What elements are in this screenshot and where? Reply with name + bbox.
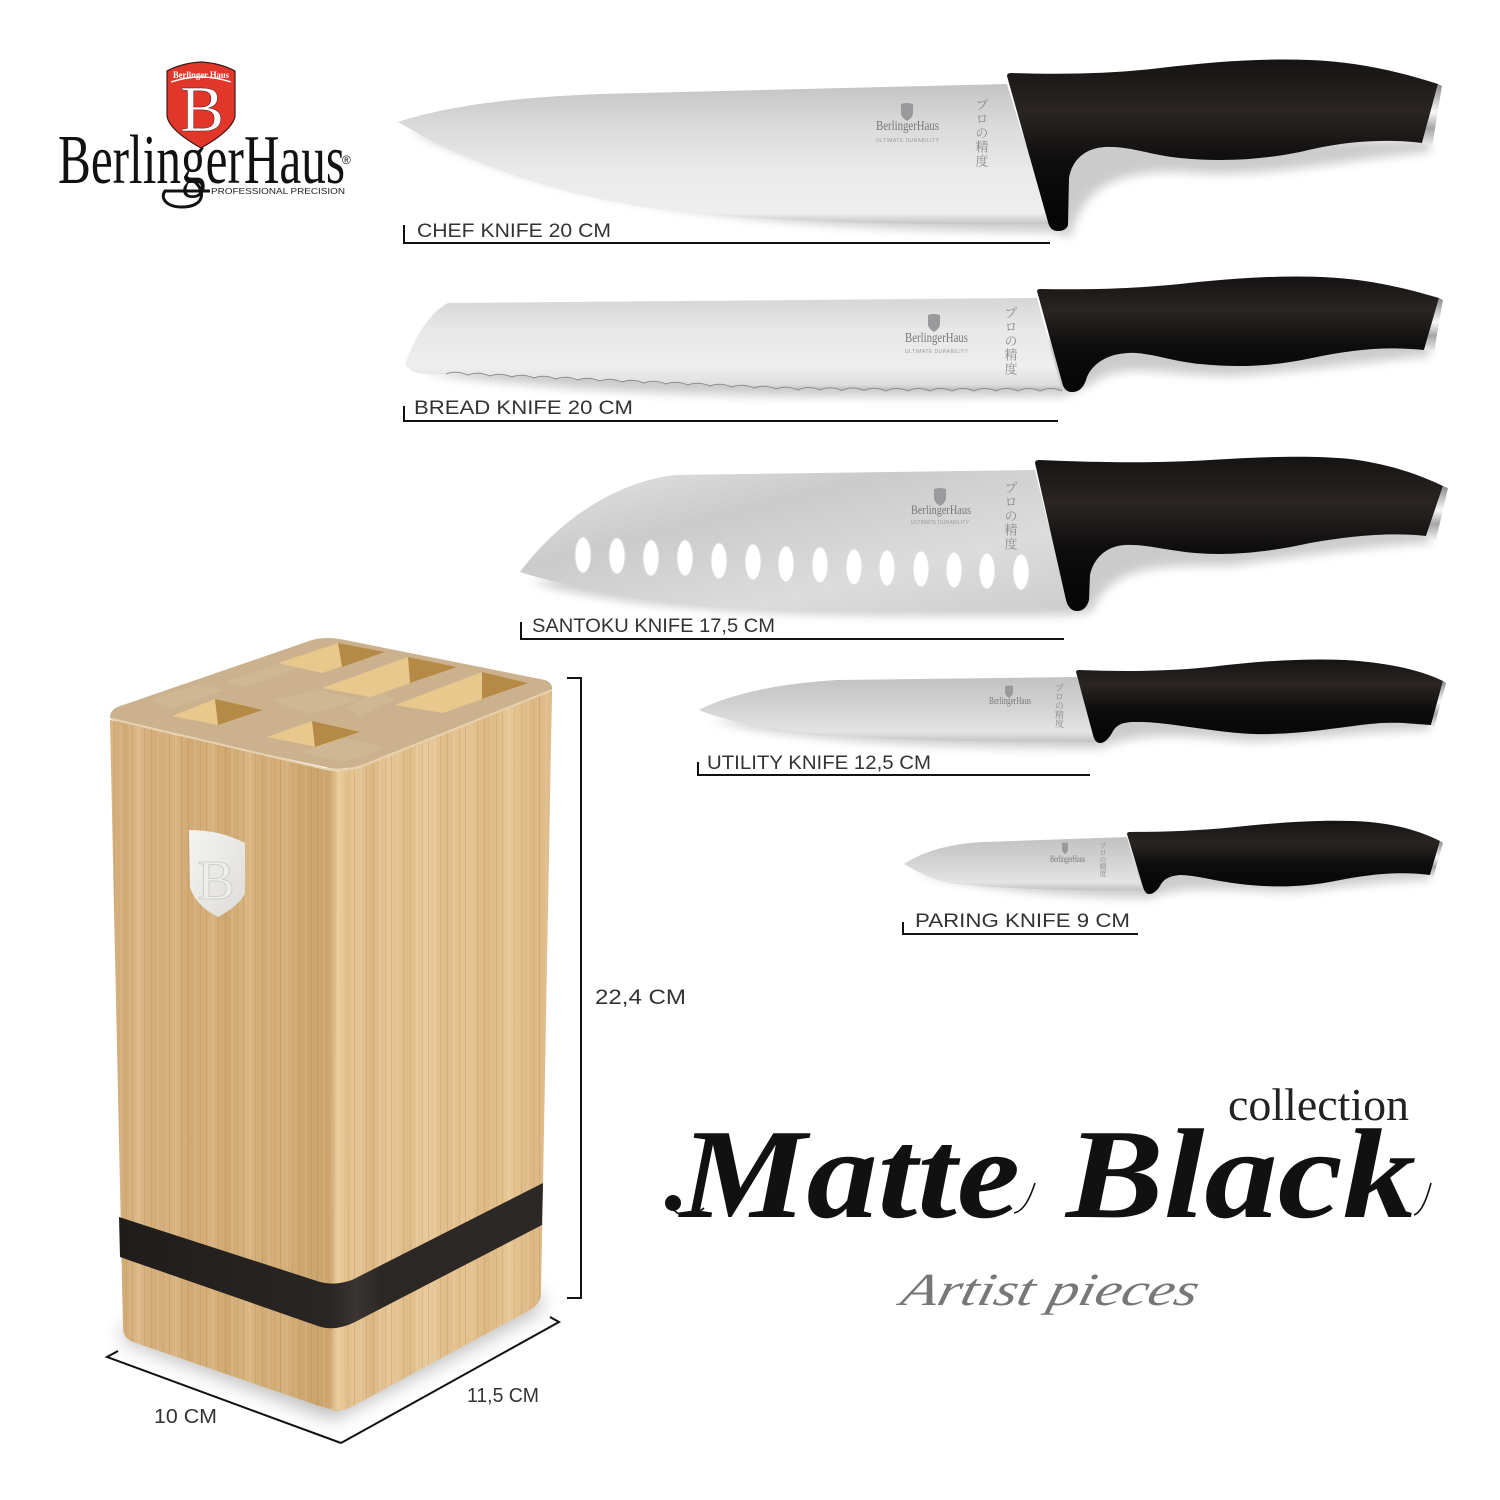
- blade engraving: プロの精度: [1002, 306, 1018, 376]
- tagline: PROFESSIONAL PRECISION: [211, 187, 345, 196]
- blade engraving: [905, 306, 1018, 376]
- blade engraving: [1050, 842, 1107, 878]
- blade engraving: BerlingerHaus: [911, 502, 971, 517]
- black band: [119, 1183, 543, 1328]
- blade: [904, 837, 1143, 890]
- blade engraving: プロの精度: [1002, 481, 1018, 551]
- bamboo knife block: [110, 638, 552, 1418]
- handle: [1037, 276, 1439, 392]
- blade engraving: ULTIMATE DURABILITY: [911, 520, 970, 526]
- icon: red shield: B: [180, 73, 224, 146]
- title flourishes: [665, 1183, 1431, 1216]
- blade engraving: ULTIMATE DURABILITY: [905, 349, 969, 355]
- santoku knife label: [521, 616, 1064, 639]
- block left face: [110, 720, 338, 1410]
- end-grain patches: [150, 664, 395, 762]
- utility knife label: UTILITY KNIFE 12,5 CM: [707, 753, 931, 774]
- brand logo: [58, 62, 351, 207]
- main title: Matte: Matte: [678, 1103, 1020, 1245]
- handle: [1076, 659, 1443, 743]
- chef knife label: CHEF KNIFE 20 CM: [417, 221, 611, 242]
- utility knife: [699, 659, 1446, 748]
- end cap: [1424, 298, 1443, 352]
- bread knife: [405, 276, 1443, 397]
- paring knife: [904, 821, 1443, 898]
- blade engraving: [876, 98, 988, 168]
- utility knife label: [698, 753, 1090, 775]
- descender loop: [163, 182, 210, 207]
- handle: [1127, 821, 1440, 894]
- blade engraving: BerlingerHaus: [905, 331, 968, 346]
- depth dimension: [341, 1317, 559, 1443]
- bread knife label: BREAD KNIFE 20 CM: [414, 398, 633, 419]
- script tagline: Artist pieces: [892, 1265, 1205, 1316]
- height dimension: [567, 678, 686, 1298]
- blade engraving: [989, 683, 1064, 728]
- santoku knife: [520, 457, 1448, 616]
- blade engraving: BerlingerHaus: [1050, 854, 1085, 864]
- granton dimples: [575, 537, 1029, 590]
- blade: [520, 470, 1068, 611]
- chef knife: [398, 59, 1442, 238]
- blade: [405, 298, 1062, 391]
- metal shield badge: [189, 830, 245, 917]
- santoku knife label: SANTOKU KNIFE 17,5 CM: [532, 616, 775, 637]
- block top face: [110, 638, 552, 769]
- blade engraving: プロの精度: [974, 98, 988, 168]
- end cap: [1422, 84, 1442, 147]
- blade engraving: ULTIMATE DURABILITY: [876, 138, 940, 144]
- bread knife label: [404, 398, 1058, 421]
- icon: red shield: [167, 62, 235, 148]
- end cap: [1430, 841, 1443, 878]
- handle: [1007, 59, 1438, 231]
- metal shield badge: B: [197, 850, 235, 912]
- brand name: BerlingerHaus: [58, 122, 345, 199]
- end cap: [1431, 681, 1446, 728]
- depth dimension: 11,5 CM: [467, 1385, 539, 1407]
- chef knife label: [404, 221, 1050, 243]
- serrated edge: [446, 372, 1062, 391]
- blade engraving: BerlingerHaus: [989, 696, 1031, 707]
- blade engraving: BerlingerHaus: [876, 119, 939, 134]
- collection title: [665, 1079, 1431, 1316]
- blade engraving: プロの精度: [1054, 683, 1064, 728]
- blade engraving: プロの精度: [1099, 842, 1107, 878]
- registered mark: ®: [342, 153, 351, 167]
- blade: [398, 84, 1050, 224]
- paring knife label: PARING KNIFE 9 CM: [915, 911, 1130, 932]
- top rim: [112, 690, 552, 770]
- handle: [1035, 457, 1443, 611]
- main title: Black: Black: [1064, 1103, 1416, 1245]
- icon: red shield: Berlinger Haus: [173, 70, 229, 80]
- height dimension: 22,4 CM: [595, 986, 686, 1009]
- blade: [699, 677, 1097, 742]
- blade engraving: [911, 481, 1018, 551]
- width dimension: [107, 1351, 341, 1443]
- block right face: [333, 688, 552, 1411]
- end cap: [1426, 486, 1448, 540]
- width dimension: 10 CM: [154, 1406, 217, 1428]
- collection word: collection: [1228, 1079, 1409, 1130]
- knife slots: [172, 643, 528, 747]
